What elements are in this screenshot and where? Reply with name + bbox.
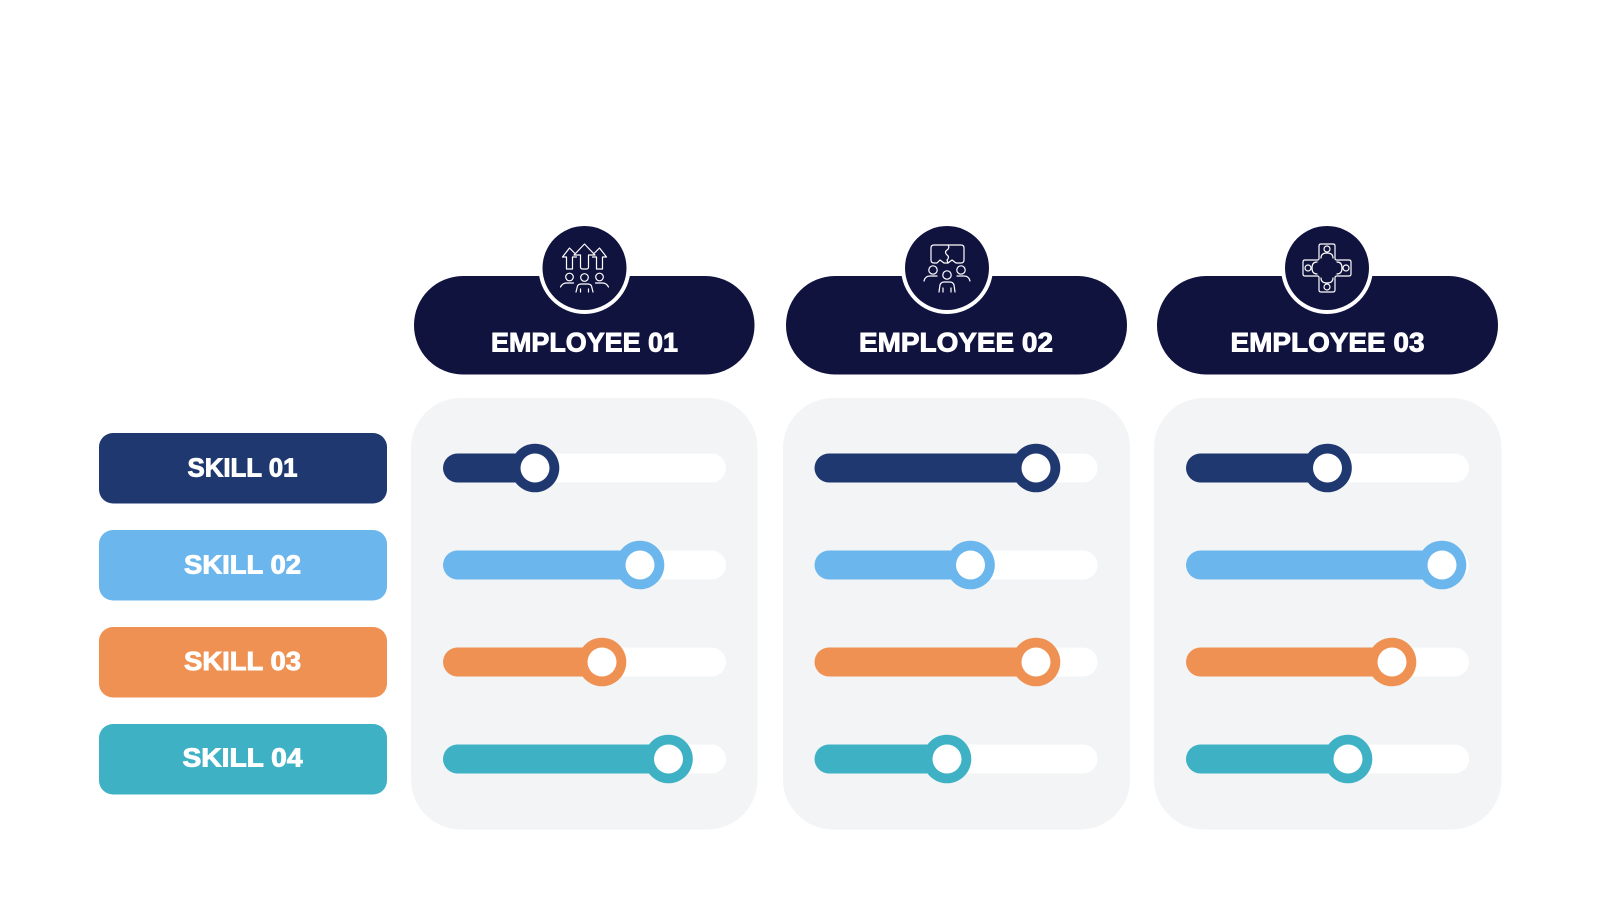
skill label 04: SKILL 04	[182, 742, 303, 772]
skill label 03	[99, 627, 387, 698]
skill label 01	[99, 433, 387, 504]
slider skill 02	[1186, 541, 1469, 589]
employee 03 header	[1157, 222, 1498, 374]
slider skill 02	[443, 541, 726, 589]
skill label 02	[99, 530, 387, 600]
employee 02 title: EMPLOYEE 02	[859, 328, 1053, 358]
employee 01 skills panel	[411, 398, 758, 830]
employee 02 header	[786, 222, 1127, 374]
employee 02 skills panel	[783, 398, 1130, 830]
employee 02 column	[783, 222, 1130, 830]
employee 01 title: EMPLOYEE 01	[491, 328, 678, 358]
skill label 04	[99, 724, 387, 794]
employee 03 column	[1154, 222, 1502, 830]
skill label 02: SKILL 02	[184, 550, 301, 580]
slider skill 03	[814, 638, 1098, 686]
employee 03 title: EMPLOYEE 03	[1230, 328, 1424, 358]
skill labels column	[99, 433, 387, 794]
slider skill 03	[443, 638, 726, 686]
slider skill 02	[814, 541, 1098, 589]
icon: team with puzzle speech bubble	[924, 245, 970, 292]
slider skill 03	[1186, 638, 1469, 686]
slider skill 04	[814, 735, 1098, 783]
employee 03 skills panel	[1154, 398, 1502, 830]
slider skill 04	[443, 735, 726, 783]
employee 01 header	[414, 222, 754, 374]
skill label 01: SKILL 01	[188, 452, 298, 482]
skill label 03: SKILL 03	[184, 646, 301, 676]
slider skill 01	[814, 444, 1098, 492]
icon: team with rising arrows	[560, 244, 608, 292]
slider skill 04	[1186, 735, 1469, 783]
icon: four people around a table	[1303, 244, 1351, 292]
slider skill 01	[443, 444, 726, 492]
slider skill 01	[1186, 444, 1469, 492]
employee 01 column	[411, 222, 758, 830]
